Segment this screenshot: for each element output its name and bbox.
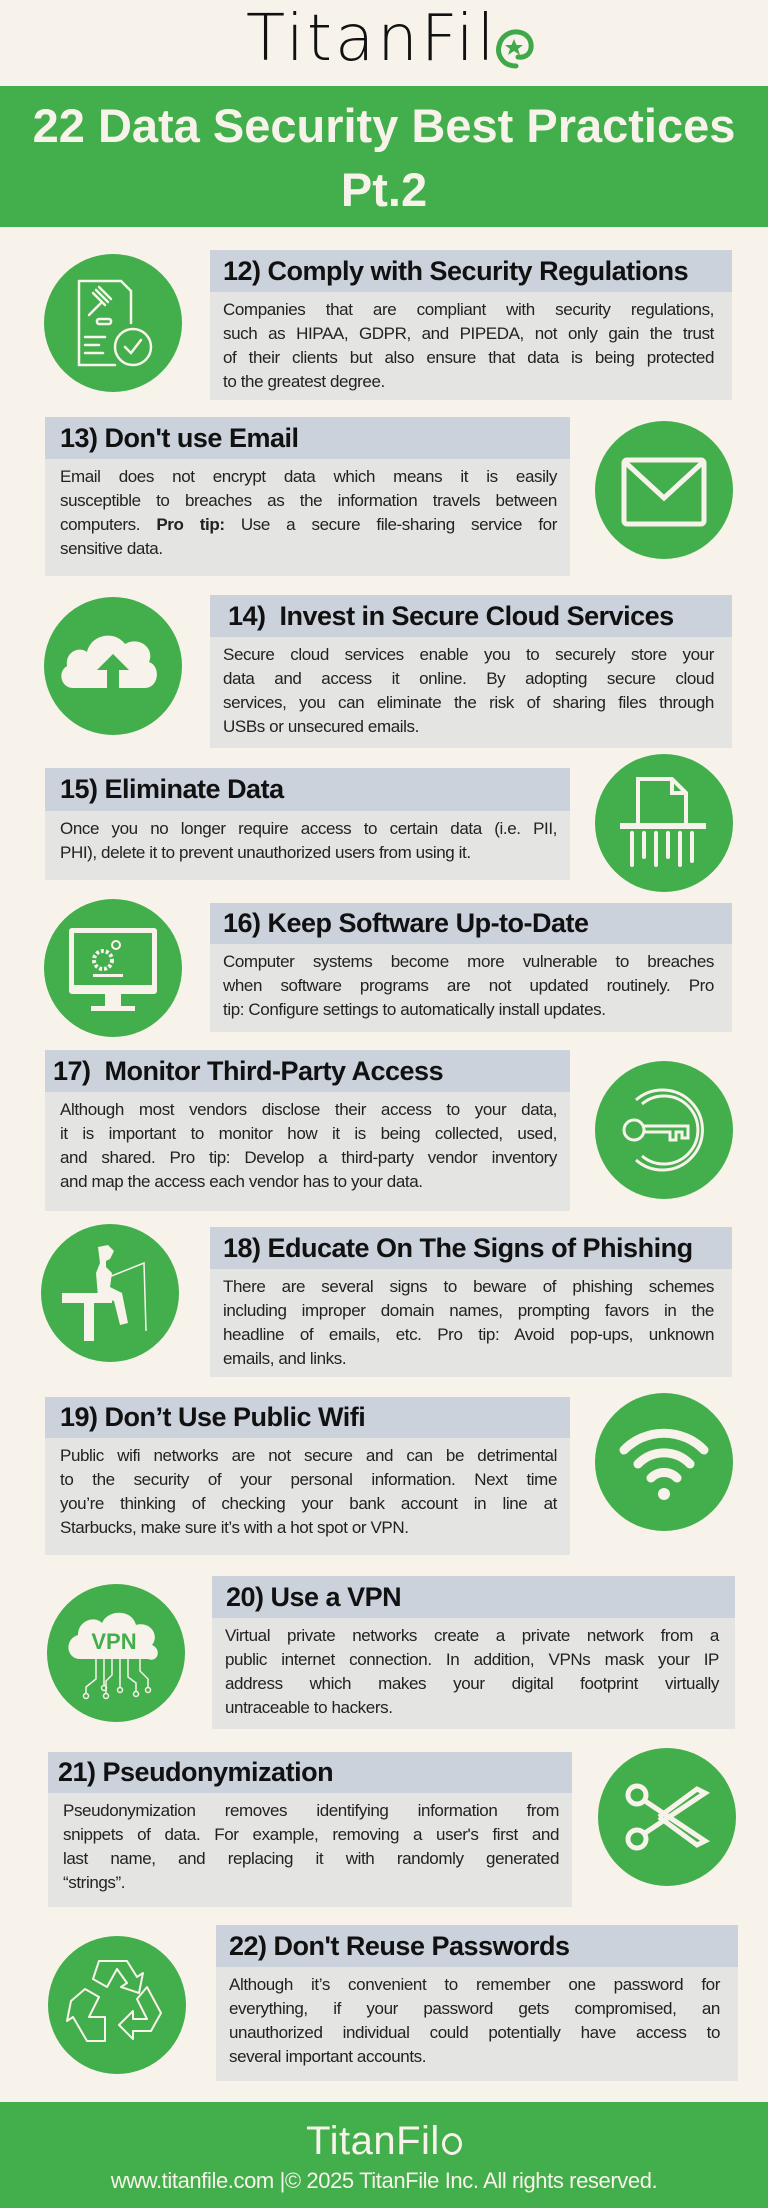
icon: logo swirl bbox=[496, 29, 534, 68]
panel 13 bbox=[45, 417, 570, 576]
text 21: Pseudonymization removes identifying information from bbox=[63, 1801, 559, 1820]
text 19 bbox=[45, 1438, 570, 1555]
title banner: 22 Data Security Best Practices bbox=[33, 99, 735, 152]
icon: cloud upload bbox=[44, 597, 182, 735]
text 14: services, you can eliminate the risk of sharing files through bbox=[223, 693, 714, 712]
heading 13 bbox=[45, 417, 570, 459]
panel 19 bbox=[45, 1397, 570, 1555]
text 14: USBs or unsecured emails. bbox=[223, 717, 419, 736]
heading 16 bbox=[210, 903, 732, 944]
heading 21: 21) Pseudonymization bbox=[58, 1757, 333, 1787]
panel 20 bbox=[212, 1576, 735, 1729]
icon: key bbox=[595, 1061, 733, 1199]
heading 18: 18) Educate On The Signs of Phishing bbox=[223, 1233, 693, 1263]
icon: VPN cloud bbox=[47, 1584, 185, 1722]
text 15: PHI), delete it to prevent unauthorized users from using it. bbox=[60, 843, 471, 862]
text 12: to the greatest degree. bbox=[223, 372, 385, 391]
heading 22: 22) Don't Reuse Passwords bbox=[229, 1931, 570, 1961]
text 12 bbox=[210, 292, 732, 400]
heading 12 bbox=[210, 250, 732, 292]
footer bbox=[0, 2102, 768, 2208]
text 19: Public wifi networks are not secure and can be detrimental bbox=[60, 1446, 557, 1465]
icon: fisherman bbox=[41, 1224, 179, 1362]
text 20: public internet connection. In addition, VPNs mask your IP bbox=[225, 1650, 719, 1669]
text 13: sensitive data. bbox=[60, 539, 163, 558]
text 14 bbox=[210, 637, 732, 748]
text 18 bbox=[210, 1269, 732, 1377]
panel 16 bbox=[210, 903, 732, 1032]
text 15: Once you no longer require access to certain data (i.e. PII, bbox=[60, 819, 557, 838]
text 15 bbox=[45, 811, 570, 880]
heading 17: 17) Monitor Third-Party Access bbox=[53, 1056, 443, 1086]
text 20: Virtual private networks create a private network from a bbox=[225, 1626, 719, 1645]
text 14: data and access it online. By adopting secure cloud bbox=[223, 669, 714, 688]
panel 22 bbox=[216, 1925, 738, 2081]
text 17 bbox=[45, 1092, 570, 1211]
text 14: Secure cloud services enable you to securely store your bbox=[223, 645, 714, 664]
text 16: when software programs are not updated routinely. Pro bbox=[223, 976, 714, 995]
text 13: computers. Pro tip: Use a secure file-sharing service for bbox=[60, 515, 557, 534]
icon: VPN cloud: VPN bbox=[91, 1629, 137, 1654]
text 17: Although most vendors disclose their access to your data, bbox=[60, 1100, 557, 1119]
footer copyright: www.titanfile.com |© 2025 TitanFile Inc. All rights reserved. bbox=[111, 2168, 657, 2193]
text 12: such as HIPAA, GDPR, and PIPEDA, not only gain the trust bbox=[223, 324, 714, 343]
text 13: Email does not encrypt data which means it is easily bbox=[60, 467, 557, 486]
text 19: Starbucks, make sure it’s with a hot spot or VPN. bbox=[60, 1518, 409, 1537]
text 20 bbox=[212, 1618, 735, 1729]
heading 12: 12) Comply with Security Regulations bbox=[223, 256, 688, 286]
heading 18 bbox=[210, 1227, 732, 1269]
text 16: tip: Configure settings to automatically install updates. bbox=[223, 1000, 606, 1019]
text 19: to the security of your personal information. Next time bbox=[60, 1470, 557, 1489]
panel 15 bbox=[45, 768, 570, 880]
logo header bbox=[246, 2, 534, 76]
text 21: “strings”. bbox=[63, 1873, 125, 1892]
text 17: and shared. Pro tip: Develop a third-party vendor inventory bbox=[60, 1148, 557, 1167]
text 12: Companies that are compliant with security regulations, bbox=[223, 300, 714, 319]
text 22: everything, if your password gets compromised, an bbox=[229, 1999, 720, 2018]
heading 15: 15) Eliminate Data bbox=[60, 774, 284, 804]
panel 17 bbox=[45, 1050, 570, 1211]
text 13: susceptible to breaches as the information travels between bbox=[60, 491, 557, 510]
heading 14 bbox=[210, 595, 732, 637]
text 21 bbox=[48, 1793, 572, 1907]
heading 21 bbox=[48, 1752, 572, 1793]
icon: email envelope bbox=[595, 421, 733, 559]
icon: recycle bbox=[48, 1936, 186, 2074]
text 22: Although it’s convenient to remember one password for bbox=[229, 1975, 720, 1994]
icon: computer update bbox=[44, 899, 182, 1037]
text 22: unauthorized individual could potentially have access to bbox=[229, 2023, 720, 2042]
panel 14 bbox=[210, 595, 732, 748]
heading 16: 16) Keep Software Up-to-Date bbox=[223, 908, 589, 938]
icon: shredder bbox=[595, 754, 733, 892]
title banner: Pt.2 bbox=[341, 163, 427, 216]
icon: scissors bbox=[598, 1748, 736, 1886]
text 22 bbox=[216, 1967, 738, 2081]
text 18: headline of emails, etc. Pro tip: Avoid pop-ups, unknown bbox=[223, 1325, 714, 1344]
text 16: Computer systems become more vulnerable to breaches bbox=[223, 952, 714, 971]
heading 20: 20) Use a VPN bbox=[226, 1582, 401, 1612]
heading 19: 19) Don’t Use Public Wifi bbox=[60, 1402, 365, 1432]
heading 15 bbox=[45, 768, 570, 811]
text 20: address which makes your digital footprint virtually bbox=[225, 1674, 719, 1693]
heading 19 bbox=[45, 1397, 570, 1438]
text 22: several important accounts. bbox=[229, 2047, 426, 2066]
logo text: TitanFil bbox=[246, 2, 498, 76]
title banner bbox=[0, 86, 768, 227]
heading 20 bbox=[212, 1576, 735, 1618]
heading 13: 13) Don't use Email bbox=[60, 423, 298, 453]
text 12: of their clients but also ensure that data is being protected bbox=[223, 348, 714, 367]
text 21: snippets of data. For example, removing a user's first and bbox=[63, 1825, 559, 1844]
icon: compliance document bbox=[44, 254, 182, 392]
panel 21 bbox=[48, 1752, 572, 1907]
text 13 bbox=[45, 459, 570, 576]
text 18: emails, and links. bbox=[223, 1349, 346, 1368]
text 18: including improper domain names, prompting favors in the bbox=[223, 1301, 714, 1320]
text 21: last name, and replacing it with randomly generated bbox=[63, 1849, 559, 1868]
text 16 bbox=[210, 944, 732, 1032]
heading 22 bbox=[216, 1925, 738, 1967]
panel 12 bbox=[210, 250, 732, 400]
text 17: it is important to monitor how it is being collected, used, bbox=[60, 1124, 557, 1143]
footer logo: TitanFil bbox=[306, 2119, 440, 2163]
panel 18 bbox=[210, 1227, 732, 1377]
text 20: untraceable to hackers. bbox=[225, 1698, 393, 1717]
text 17: and map the access each vendor has to your data. bbox=[60, 1172, 423, 1191]
text 19: you’re thinking of checking your bank account in line at bbox=[60, 1494, 557, 1513]
icon: wifi bbox=[595, 1393, 733, 1531]
heading 17 bbox=[45, 1050, 570, 1092]
text 18: There are several signs to beware of phishing schemes bbox=[223, 1277, 714, 1296]
heading 14: 14) Invest in Secure Cloud Services bbox=[228, 601, 674, 631]
